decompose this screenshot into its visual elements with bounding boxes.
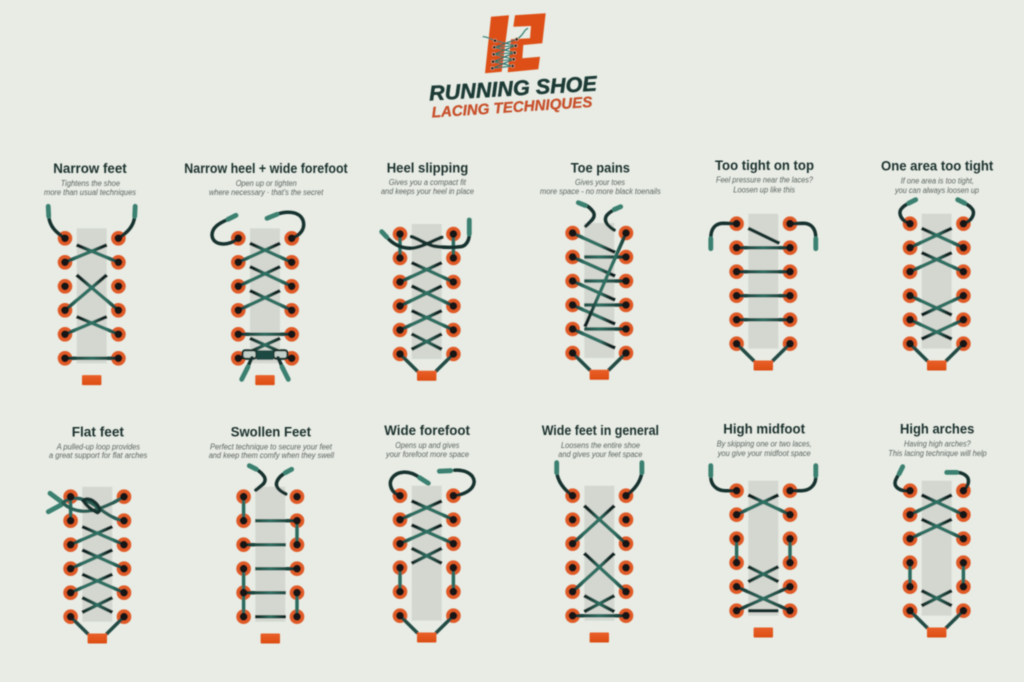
description: If one area is too tight, xyxy=(901,176,974,186)
description: Opens up and gives xyxy=(395,441,459,450)
lacing diagram xyxy=(48,487,131,644)
description: Loosen up like this xyxy=(733,186,795,195)
lacing diagram xyxy=(895,467,971,638)
lacing diagram xyxy=(212,212,304,385)
heading: One area too tight xyxy=(881,158,994,174)
description: Perfect technique to secure your feet xyxy=(210,442,333,451)
description: Tightens the shoe xyxy=(61,179,121,188)
description: you give your midfoot space xyxy=(717,449,811,458)
description: you can always loosen up xyxy=(894,186,979,195)
description: Gives you a compact fit xyxy=(389,178,467,187)
description: Gives your toes xyxy=(575,178,625,187)
heading: Narrow heel + wide forefoot xyxy=(184,160,348,176)
description: more space - no more black toenails xyxy=(540,187,661,196)
description: and gives your feet space xyxy=(558,450,643,459)
heading: Too tight on top xyxy=(715,157,814,173)
panel: too tight on top xyxy=(711,157,816,370)
description xyxy=(209,179,324,197)
panel: wide forefoot xyxy=(384,422,474,642)
heading: Swollen Feet xyxy=(231,424,311,440)
description: Having high arches? xyxy=(904,440,971,449)
description: more than usual techniques xyxy=(44,188,136,197)
lacing diagram xyxy=(390,470,474,642)
description: where necessary · that's the secret xyxy=(209,188,324,197)
panel: toe pains xyxy=(540,160,661,380)
description: By skipping one or two laces, xyxy=(717,440,812,449)
description: your forefoot more space xyxy=(385,450,470,459)
description xyxy=(888,440,987,458)
panel: flat feet xyxy=(48,424,147,644)
description: A pulled-up loop provides xyxy=(56,442,140,451)
title block xyxy=(428,13,599,121)
lacing diagram xyxy=(557,463,642,642)
description: a great support for flat arches xyxy=(49,451,147,460)
lacing diagram xyxy=(48,206,135,385)
lacing diagram xyxy=(711,214,816,370)
heading: Wide feet in general xyxy=(542,422,659,438)
lacing diagram xyxy=(565,203,633,380)
heading: Narrow feet xyxy=(53,160,127,176)
description xyxy=(44,179,136,197)
description: Open up or tighten xyxy=(236,179,297,188)
heading: Flat feet xyxy=(72,424,124,440)
description xyxy=(209,442,334,460)
logo: number 12 with laces xyxy=(483,13,546,73)
heading: Toe pains xyxy=(571,160,630,176)
lacing diagram xyxy=(900,200,973,370)
lacing diagram xyxy=(382,220,469,381)
heading: High midfoot xyxy=(723,420,805,436)
heading: Wide forefoot xyxy=(384,422,470,438)
description xyxy=(894,176,979,195)
lacing diagram xyxy=(711,466,816,638)
description xyxy=(716,176,813,195)
description xyxy=(558,441,643,459)
description xyxy=(717,440,812,458)
description: and keeps your heel in place xyxy=(381,187,474,196)
panel: narrow heel + wide forefoot xyxy=(184,160,348,385)
heading: High arches xyxy=(900,420,974,436)
description: and keep them comfy when they swell xyxy=(209,451,334,460)
panel: narrow feet xyxy=(44,160,136,385)
panel: heel slipping xyxy=(381,160,474,381)
panel: high arches xyxy=(888,420,987,638)
panel: high midfoot xyxy=(711,420,816,638)
lacing diagram xyxy=(236,466,304,644)
description xyxy=(49,442,147,460)
heading: Heel slipping xyxy=(387,160,468,176)
panel: swollen feet xyxy=(209,424,334,644)
title line 1: RUNNING SHOE xyxy=(428,73,599,105)
title line 2: LACING TECHNIQUES xyxy=(431,94,593,121)
panel: wide feet in general xyxy=(542,422,659,642)
description: Loosens the entire shoe xyxy=(561,441,640,450)
description: This lacing technique will help xyxy=(888,449,987,458)
description xyxy=(381,178,474,196)
description xyxy=(385,441,470,459)
description xyxy=(540,178,661,196)
description: Feel pressure near the laces? xyxy=(716,176,813,185)
panel: one area too tight xyxy=(881,158,994,370)
